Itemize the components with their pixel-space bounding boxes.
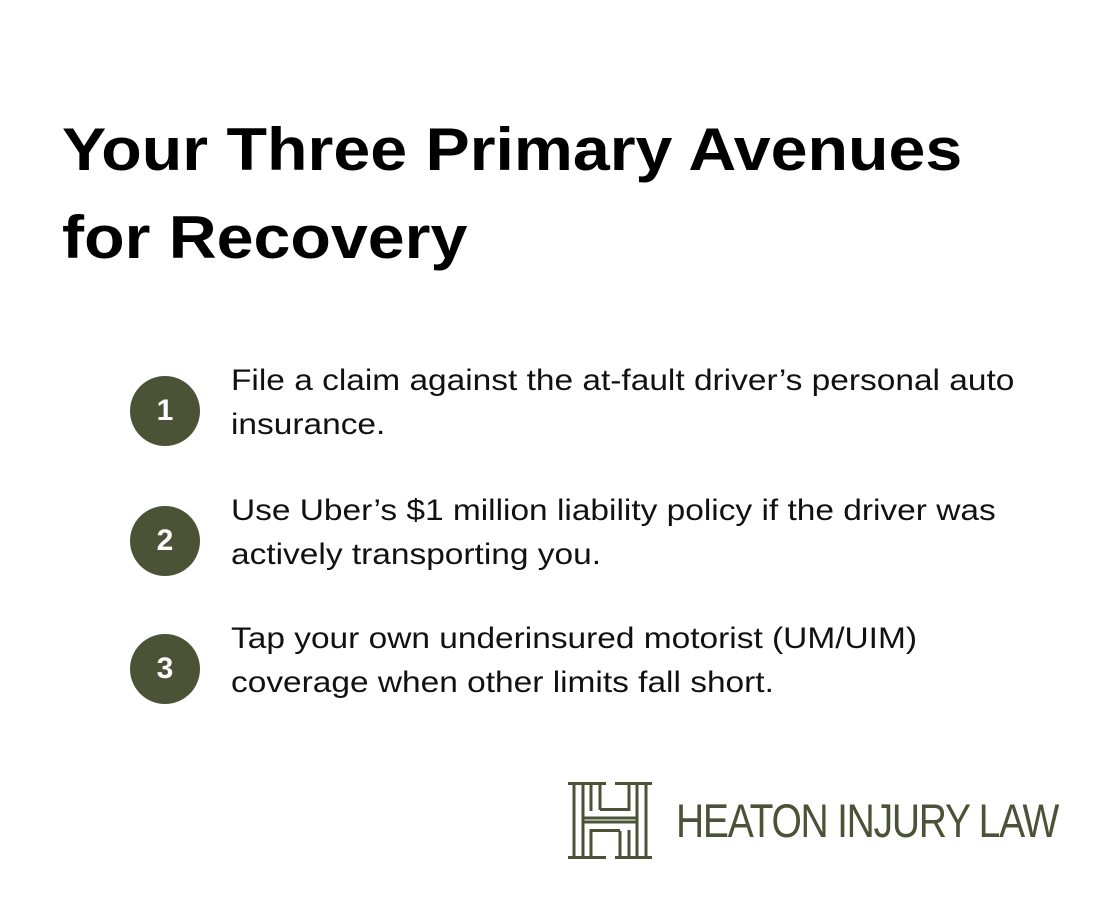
title: for Recovery [62, 204, 467, 271]
icon: H mark [568, 782, 652, 859]
item 2 [130, 494, 996, 576]
text 1 [231, 364, 1014, 441]
item 3 [130, 622, 917, 704]
item 1 [130, 364, 1014, 446]
badge 3: 3 [157, 652, 173, 685]
text 3: Tap your own underinsured motorist (UM/UIM) [231, 622, 917, 655]
badge 1 [130, 376, 200, 446]
title: Your Three Primary Avenues [62, 116, 962, 183]
text 3: coverage when other limits fall short. [231, 666, 774, 699]
badge 2: 2 [157, 524, 173, 557]
logo [568, 782, 1060, 859]
text 3 [231, 622, 917, 699]
text 2: actively transporting you. [231, 538, 601, 571]
text 1: insurance. [231, 408, 385, 441]
text 1: File a claim against the at-fault driver’s personal auto [231, 364, 1014, 397]
badge 1: 1 [157, 394, 173, 427]
text 2 [231, 494, 996, 571]
badge 3 [130, 634, 200, 704]
text 2: Use Uber’s $1 million liability policy if the driver was [231, 494, 996, 527]
badge 2 [130, 506, 200, 576]
title [62, 116, 962, 271]
logo text: HEATON INJURY LAW [676, 794, 1058, 847]
